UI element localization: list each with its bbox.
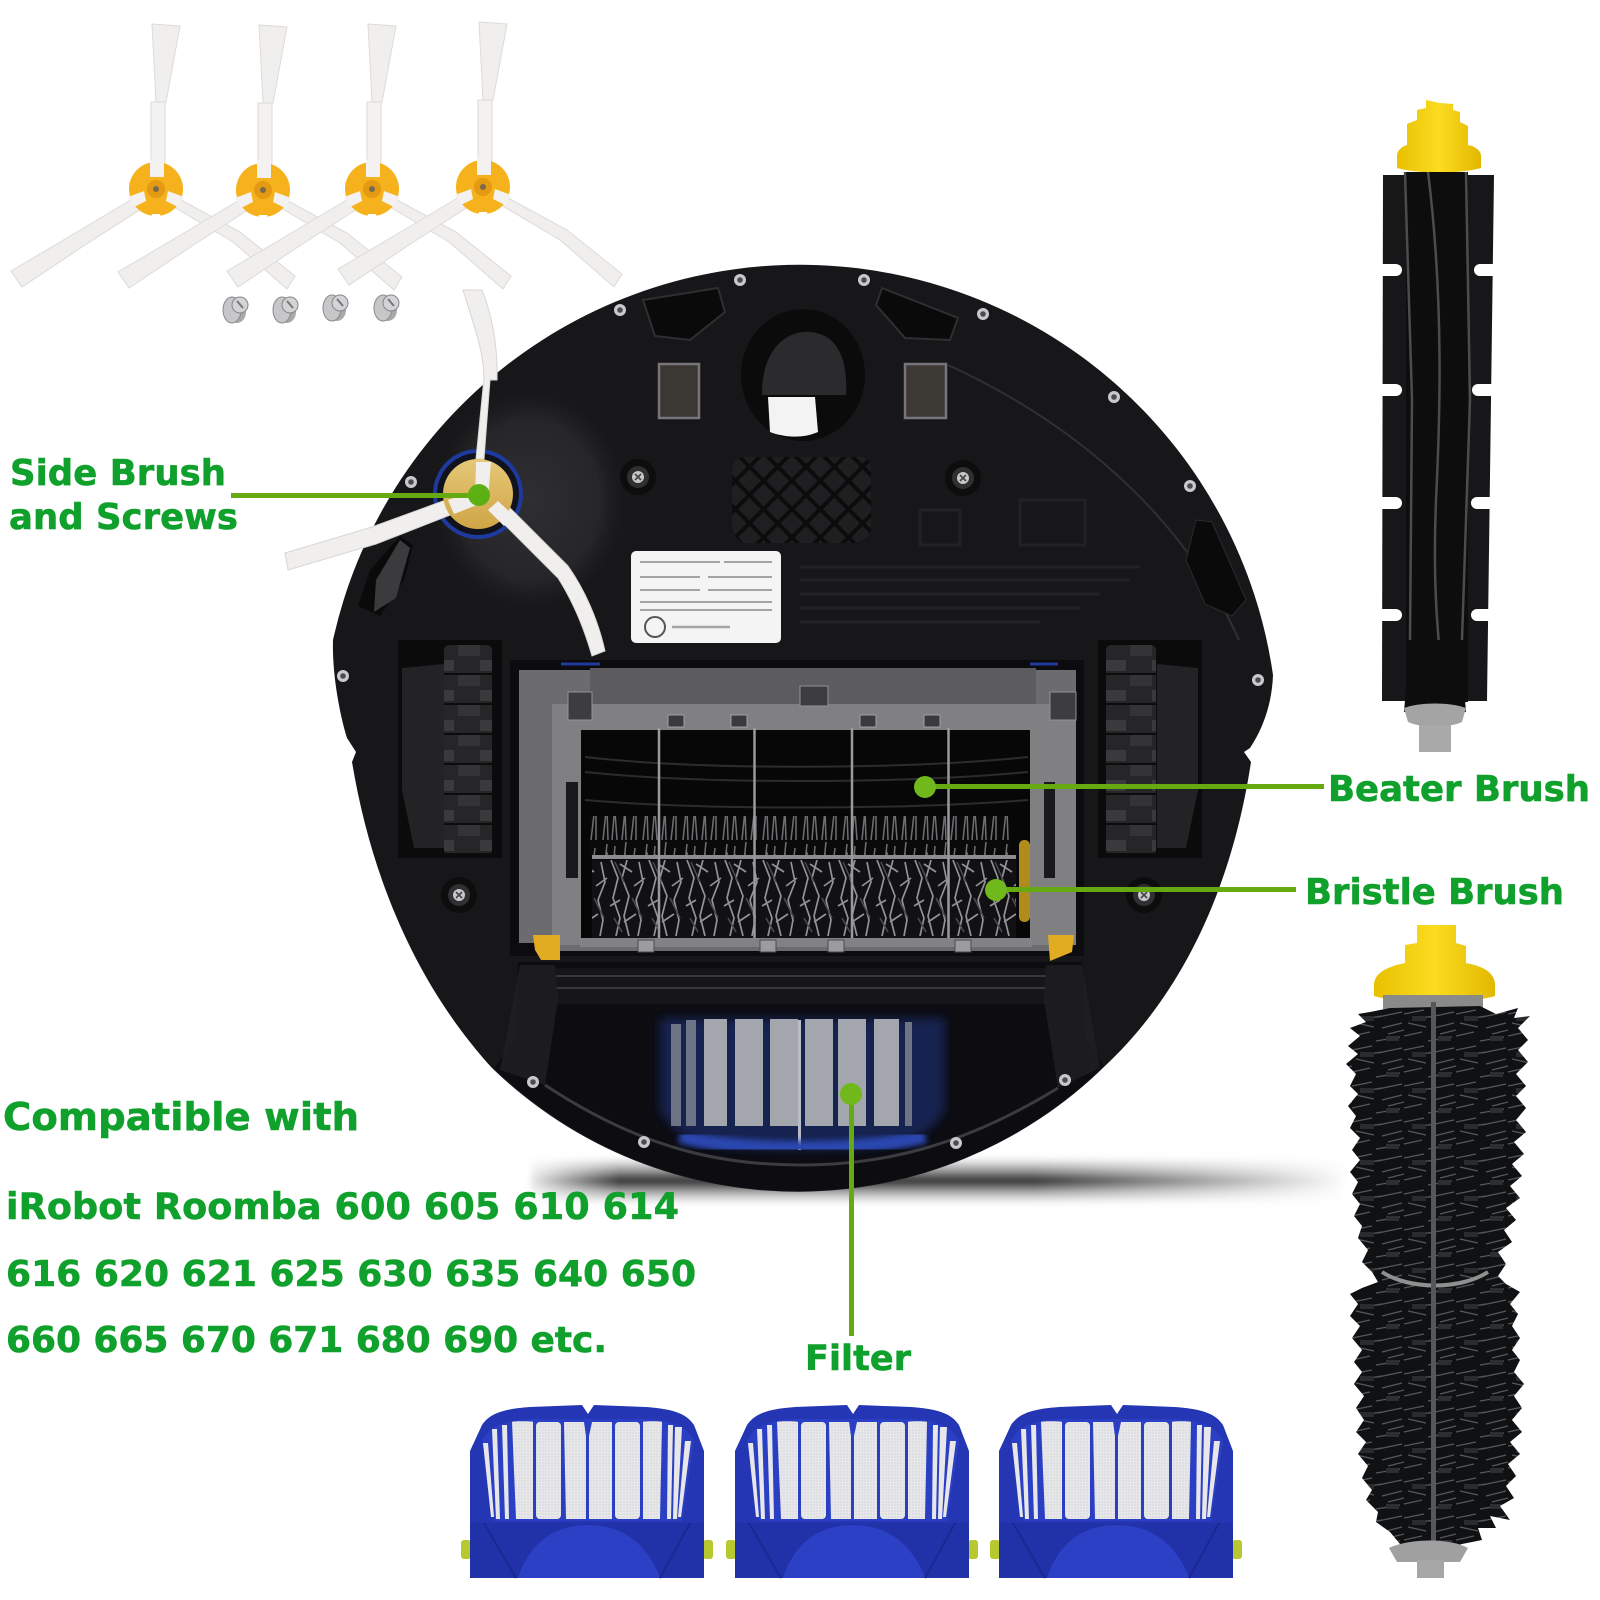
bin screws (527, 1074, 1071, 1149)
callout: beater brush (914, 776, 1324, 798)
label: filter: Filter (805, 1339, 912, 1379)
beater yellow cap (1397, 100, 1481, 172)
bottom clips (638, 940, 971, 952)
spare side brush 1 (11, 24, 295, 289)
dot (840, 1083, 862, 1105)
filter 1 (461, 1405, 713, 1578)
brush silhouette (1346, 1006, 1530, 1552)
label: side brush: Side Brush (10, 453, 226, 494)
dot (985, 879, 1007, 901)
beater fins (1382, 175, 1494, 701)
model line 1: iRobot Roomba 600 605 610 614 (6, 1185, 679, 1228)
lighter inner frame (552, 704, 1076, 945)
label: and screws: and Screws (9, 497, 238, 538)
hub (443, 459, 513, 529)
axle collar (1404, 704, 1466, 726)
spare side brush 2 (118, 25, 402, 290)
beater brush product (1378, 100, 1498, 752)
gray end collar (1389, 1540, 1468, 1562)
rear slot left (643, 288, 725, 340)
inner arc seam (948, 365, 1239, 640)
blue accents (561, 662, 1058, 666)
left bumper slot (358, 536, 413, 616)
rear slot right (876, 288, 958, 340)
bristle roller (592, 860, 1016, 938)
bin floor (494, 962, 1104, 1191)
model line 3: 660 665 670 671 680 690 etc. (6, 1320, 607, 1361)
bristle brush product (1346, 925, 1530, 1578)
installed side brush (285, 290, 605, 656)
embossed regulatory marks (800, 500, 1140, 622)
screws (223, 295, 399, 323)
top clips (668, 715, 940, 727)
left bumper piece (374, 540, 410, 612)
spare side brush 3 (227, 24, 511, 289)
perimeter screws (337, 274, 1264, 686)
leader line (925, 784, 1324, 789)
clear corners (500, 965, 558, 1085)
frame latches (568, 686, 1076, 720)
dot (914, 776, 936, 798)
center screws (441, 459, 1162, 913)
axle stem (1419, 725, 1451, 752)
heading: Compatible with (3, 1095, 359, 1140)
spare side brush 4 (338, 22, 622, 287)
yellow latch right (1048, 935, 1074, 961)
bristle end hub (1383, 995, 1483, 1009)
sensor window left (659, 364, 699, 418)
textured pad (732, 457, 871, 543)
spring band (1382, 1272, 1488, 1286)
yellow latch left (533, 935, 560, 960)
cleaning head assembly (510, 660, 1084, 961)
filter 2 (726, 1405, 978, 1578)
blue ring (435, 451, 521, 537)
callout: bristle brush (985, 879, 1296, 901)
clear dust bin (494, 962, 1104, 1191)
bottom frame bar (580, 938, 1032, 947)
bristle yellow cap (1374, 925, 1495, 1002)
side brush: four spares (11, 22, 622, 290)
leader line (996, 887, 1296, 892)
left wheel (398, 640, 502, 858)
leader line (231, 493, 478, 498)
roller yellow end (1019, 840, 1030, 922)
retaining wires (659, 728, 948, 940)
beater fin bands (585, 757, 1028, 808)
label: beater brush: Beater Brush (1328, 769, 1590, 810)
body shading around side brush (430, 385, 630, 615)
roller top bar (592, 855, 1016, 859)
model line 2: 616 620 621 625 630 635 640 650 (6, 1254, 696, 1295)
robot body shell (333, 265, 1273, 1192)
bin rim (545, 1085, 1058, 1165)
bin top bar (556, 968, 1046, 1004)
upper brush hairs (590, 816, 1010, 858)
fin notches (1378, 264, 1498, 621)
twisted core lines (1405, 172, 1470, 700)
gray outer frame (519, 670, 1076, 951)
compatibility text (3, 1095, 696, 1361)
floor shadow under robot (530, 1157, 1345, 1205)
upper gray recess (590, 668, 1036, 704)
robot vacuum underside (285, 265, 1273, 1192)
dot (468, 484, 490, 506)
right bumper slot (1186, 520, 1246, 616)
head recess (510, 660, 1084, 956)
lower taper (1404, 640, 1466, 712)
brush arms (463, 290, 497, 459)
filter 3 (990, 1405, 1242, 1578)
filter seen through bin (660, 1018, 945, 1150)
sensor window right (905, 364, 946, 418)
dark core (1406, 172, 1468, 702)
side grilles (566, 782, 1055, 878)
label: bristle brush: Bristle Brush (1305, 872, 1564, 913)
caster wheel housing (741, 309, 865, 441)
central spine (1431, 1002, 1436, 1542)
spec label sticker (631, 551, 781, 643)
leader line (849, 1094, 854, 1336)
right wheel (1098, 640, 1202, 858)
callout: side brush (231, 484, 490, 506)
callout: filter (840, 1083, 862, 1336)
end stub (1417, 1560, 1444, 1578)
brush window (581, 730, 1030, 938)
